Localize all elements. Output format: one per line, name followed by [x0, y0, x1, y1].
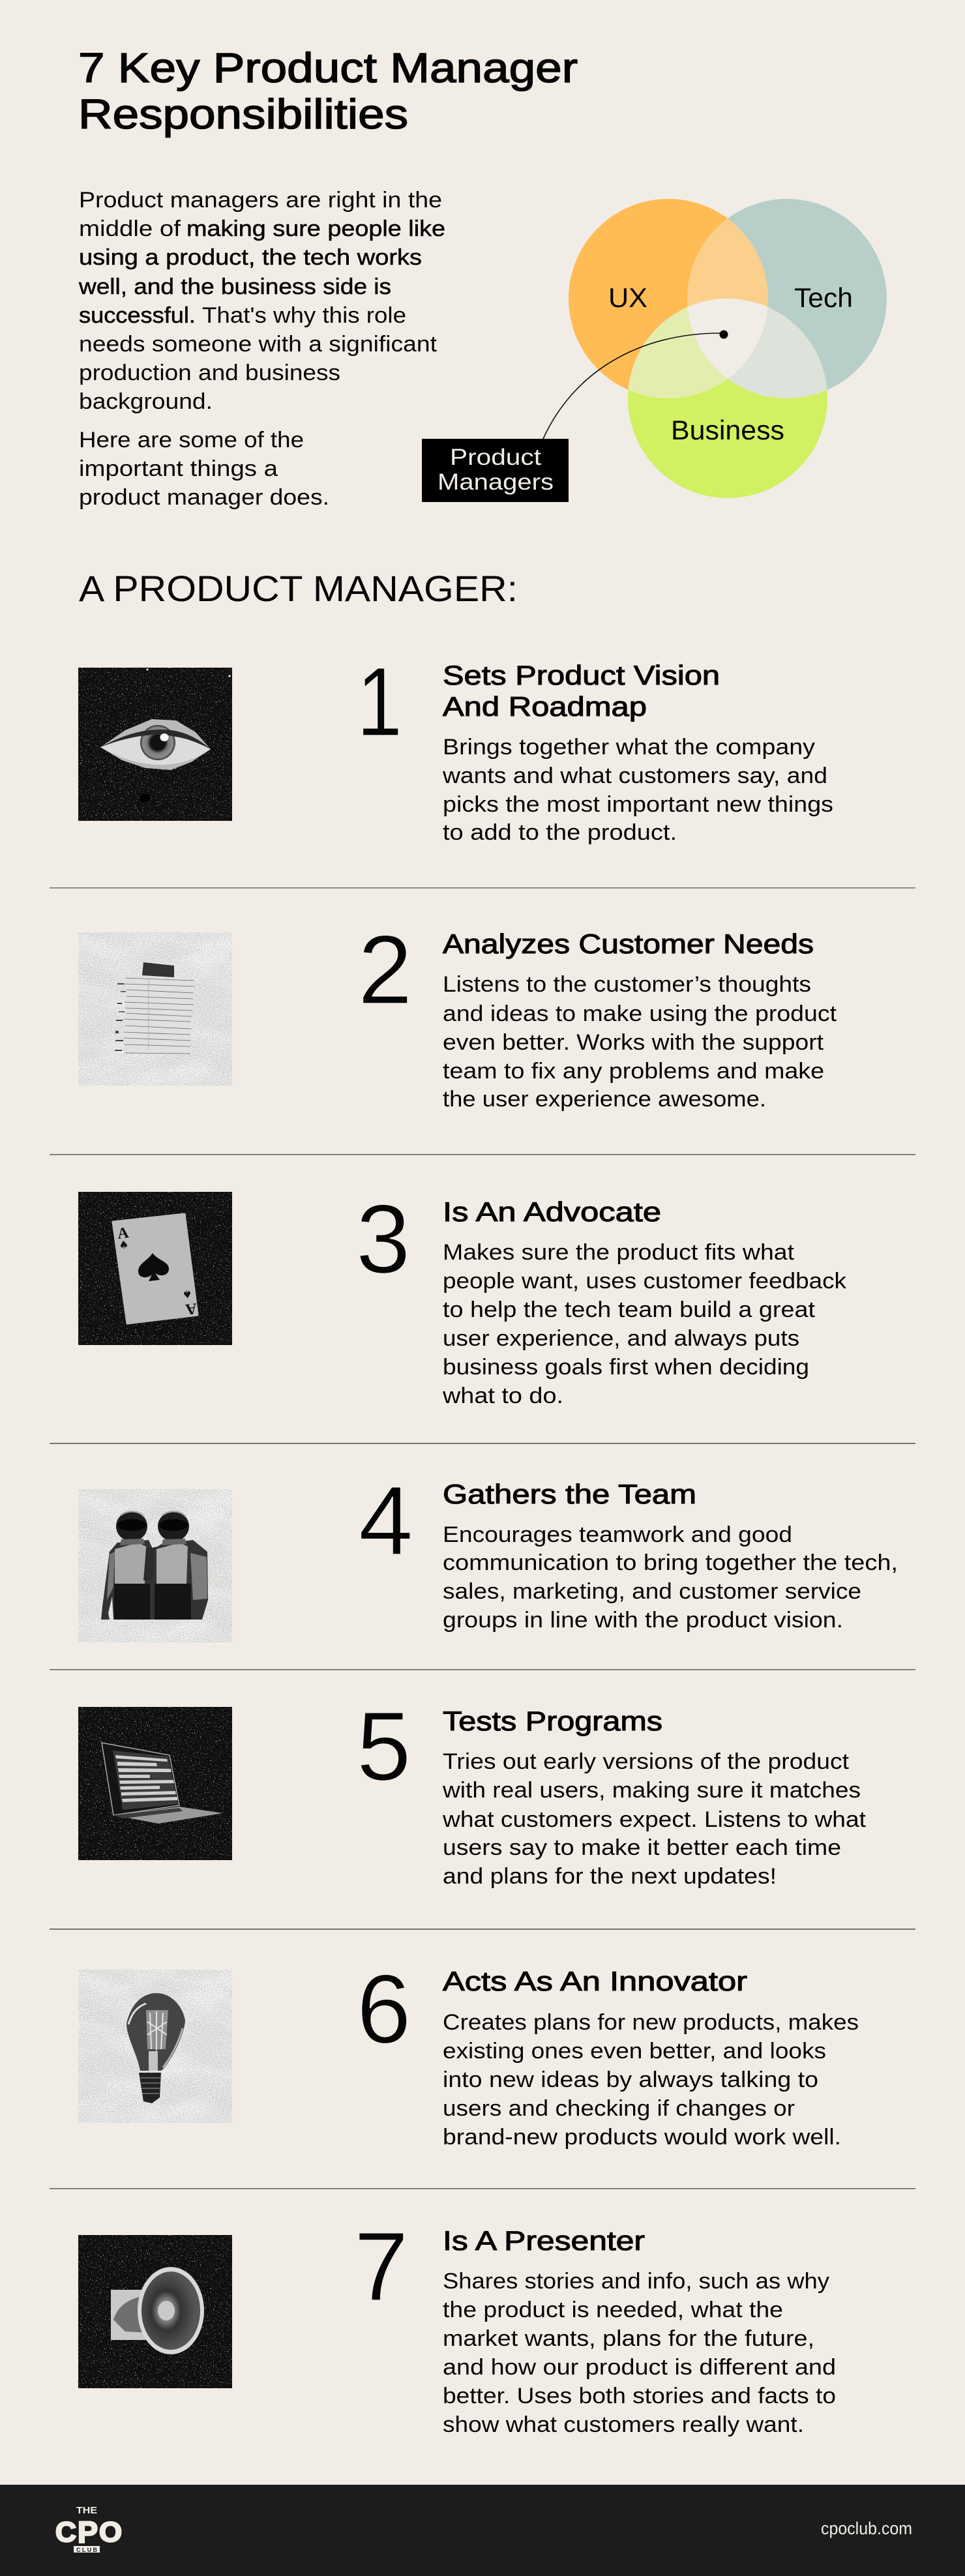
callout: Product Managers: Managers: [438, 469, 554, 495]
intro text: production and business: [79, 361, 340, 385]
number 3: 3: [356, 1184, 410, 1294]
description: Makes sure the product fits what: [443, 1240, 795, 1265]
image: loudspeaker: [78, 2235, 232, 2388]
intro text: making sure people like: [186, 216, 445, 241]
intro text: important things a: [79, 456, 278, 481]
description: what customers expect. Listens to what: [442, 1807, 867, 1832]
panel: responsibility 5: [78, 1691, 867, 1889]
description: show what customers really want.: [443, 2412, 804, 2437]
logo: The CPO Club: CLUB: [76, 2547, 98, 2553]
description: people want, uses customer feedback: [443, 1269, 847, 1294]
logo: The CPO Club: P: [78, 2515, 98, 2549]
intro text: successful.: [79, 303, 196, 328]
image: ace of spades: ♠: [118, 1238, 130, 1252]
description: Tries out early versions of the product: [443, 1749, 850, 1774]
image: ace of spades: A: [184, 1299, 198, 1318]
logo: The CPO Club: O: [99, 2517, 122, 2548]
description: brand-new products would work well.: [443, 2125, 841, 2150]
logo: The CPO Club: [55, 2505, 122, 2553]
intro text: well, and the business side is: [78, 274, 391, 299]
intro text: [78, 188, 445, 510]
panel: responsibility 1: [78, 647, 833, 845]
panel: responsibility 4: [78, 1466, 898, 1642]
description: [443, 972, 837, 1112]
overlap: centre: [687, 299, 768, 379]
heading: And Roadmap: [443, 691, 647, 722]
number 5: 5: [357, 1691, 411, 1801]
description: [443, 1522, 898, 1633]
intro text: using a product, the tech works: [79, 245, 422, 270]
description: communication to bring together the tech,: [443, 1550, 898, 1575]
dividers: [50, 887, 915, 889]
description: Shares stories and info, such as why: [443, 2269, 829, 2294]
heading: Tests Programs: [443, 1706, 662, 1736]
title: 7 Key Product Manager: [78, 44, 578, 91]
description: and ideas to make using the product: [443, 1001, 837, 1026]
panel: responsibility 7: [78, 2212, 836, 2437]
intro text: Product managers are right in the: [79, 188, 442, 213]
description: sales, marketing, and customer service: [443, 1579, 861, 1604]
panel: responsibility 6: [78, 1954, 859, 2150]
intro text: background.: [79, 389, 213, 414]
description: users say to make it better each time: [443, 1835, 841, 1860]
logo: The CPO Club: THE: [76, 2505, 97, 2516]
description: team to fix any problems and make: [443, 1059, 824, 1084]
image: eye: [78, 668, 232, 821]
heading: [443, 660, 720, 722]
description: [442, 735, 833, 845]
heading: Is A Presenter: [443, 2225, 645, 2256]
description: what to do.: [442, 1384, 563, 1408]
description: [442, 1240, 847, 1408]
intro text: middle of: [79, 216, 181, 241]
label: UX: UX: [608, 282, 647, 313]
description: [443, 2269, 836, 2437]
description: Listens to the customer’s thoughts: [443, 972, 811, 997]
circle: UX: [569, 199, 768, 398]
title: Responsibilities: [78, 91, 408, 138]
image: ace of spades: [78, 1192, 232, 1345]
intro text: needs someone with a significant: [79, 332, 438, 357]
website link: cpoclub.com: [821, 2519, 912, 2538]
logo: The CPO Club: C: [55, 2517, 76, 2548]
label: Business: Business: [671, 415, 784, 445]
description: [443, 2010, 859, 2150]
heading: Acts As An Innovator: [443, 1966, 747, 1996]
panel: responsibility 3: [78, 1184, 847, 1408]
section heading: A PRODUCT MANAGER:: [79, 568, 518, 609]
overlap: Tech and Business: [687, 299, 827, 398]
description: [442, 1749, 867, 1889]
image: laptop: [78, 1707, 232, 1860]
label: Tech: Tech: [794, 282, 853, 313]
description: existing ones even better, and looks: [443, 2039, 826, 2064]
intro text: product manager does.: [79, 485, 329, 510]
description: better. Uses both stories and facts to: [443, 2384, 836, 2408]
description: business goals first when deciding: [443, 1355, 809, 1380]
image: astronauts: [78, 1489, 232, 1642]
number 1: 1: [357, 647, 402, 756]
callout: Product Managers: [422, 439, 569, 502]
description: the product is needed, what the: [443, 2298, 783, 2322]
image: light bulb: [78, 1970, 232, 2123]
connector arrow: [543, 330, 728, 439]
description: with real users, making sure it matches: [442, 1778, 861, 1803]
number 6: 6: [357, 1954, 411, 2064]
description: market wants, plans for the future,: [443, 2326, 814, 2351]
description: users and checking if changes or: [443, 2096, 795, 2121]
description: into new ideas by always talking to: [443, 2067, 818, 2092]
footer: [0, 2485, 965, 2576]
description: Creates plans for new products, makes: [443, 2010, 859, 2035]
image: lined note: [78, 932, 232, 1086]
circle: Tech: [687, 199, 887, 398]
number 4: 4: [359, 1466, 413, 1575]
heading: Sets Product Vision: [443, 660, 720, 690]
image: ace of spades: A: [117, 1224, 130, 1243]
number 7: 7: [354, 2212, 408, 2321]
description: user experience, and always puts: [443, 1326, 799, 1351]
description: Encourages teamwork and good: [443, 1522, 792, 1547]
heading: Gathers the Team: [443, 1479, 696, 1509]
callout: Product Managers: Product: [450, 445, 541, 470]
description: picks the most important new things: [443, 792, 833, 817]
intro text: That's why this role: [202, 303, 406, 328]
image: ace of spades: ♠: [181, 1286, 193, 1301]
overlap: UX and Tech: [687, 218, 768, 307]
heading: Analyzes Customer Needs: [443, 928, 814, 959]
description: and plans for the next updates!: [443, 1864, 777, 1889]
description: even better. Works with the support: [443, 1030, 824, 1055]
description: groups in line with the product vision.: [443, 1608, 843, 1633]
panel: responsibility 2: [78, 915, 837, 1112]
venn diagram: [422, 199, 887, 502]
title: [78, 44, 578, 138]
intro text: Here are some of the: [79, 428, 304, 452]
heading: Is An Advocate: [443, 1196, 661, 1227]
description: wants and what customers say, and: [442, 763, 827, 788]
description: to add to the product.: [443, 820, 677, 845]
description: the user experience awesome.: [443, 1087, 766, 1112]
description: and how our product is different and: [443, 2355, 836, 2380]
number 2: 2: [358, 915, 412, 1024]
overlap: UX and Business: [629, 307, 728, 398]
description: to help the tech team build a great: [443, 1297, 816, 1322]
circle: Business: [628, 299, 827, 498]
description: Brings together what the company: [443, 735, 815, 760]
